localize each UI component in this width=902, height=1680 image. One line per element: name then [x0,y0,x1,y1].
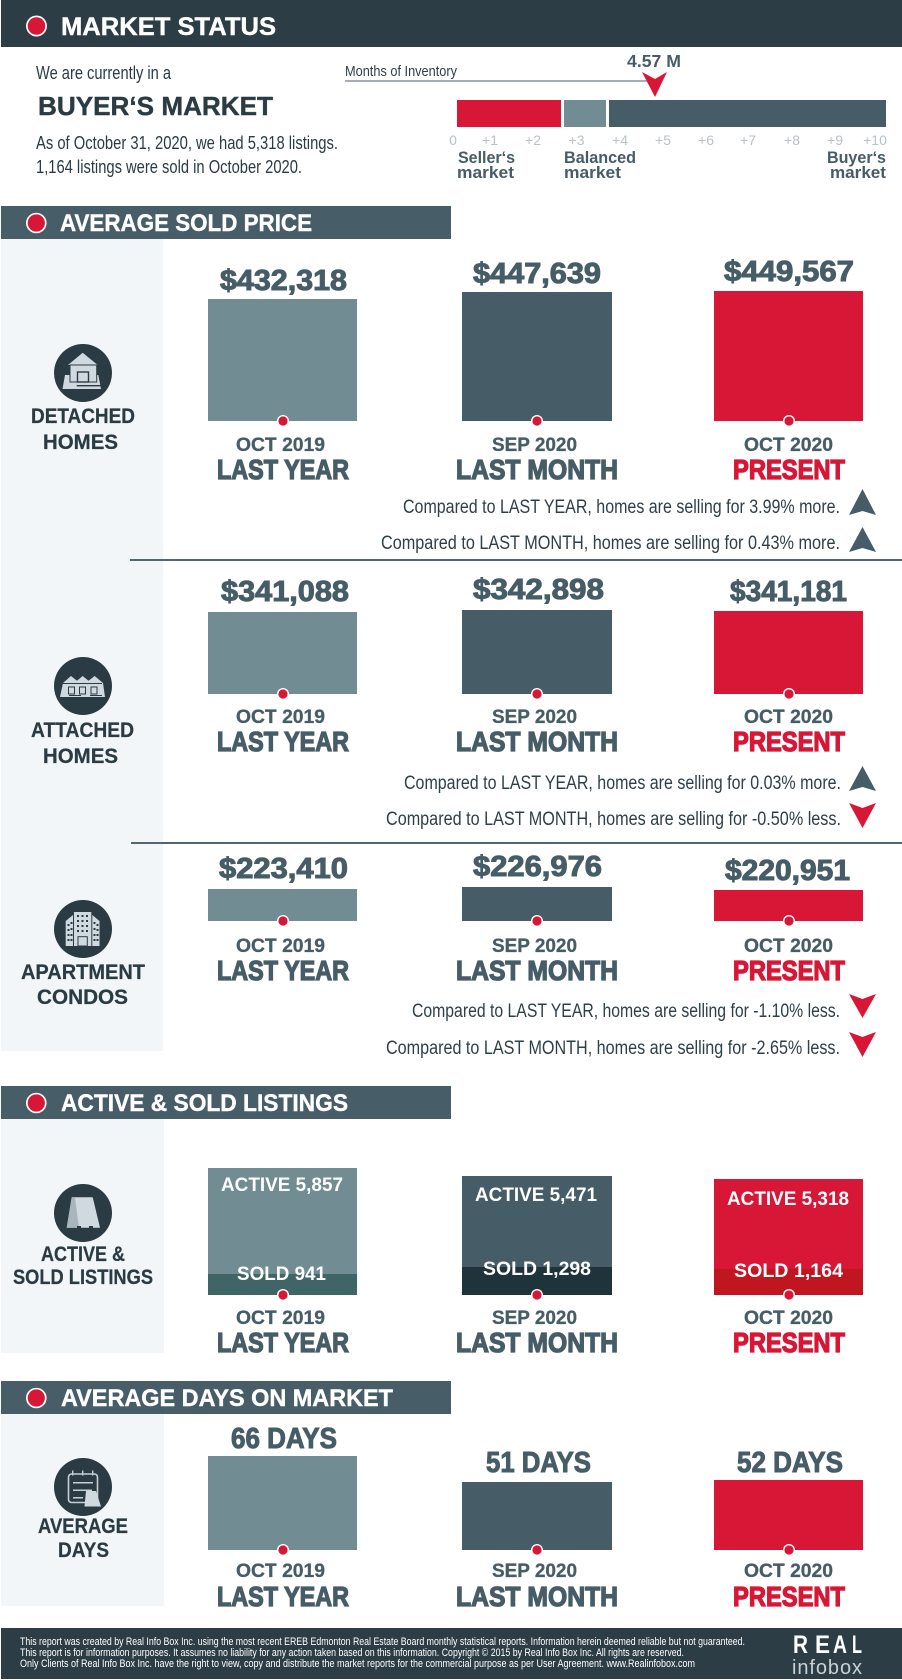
disclaimer text: Only Clients of Real Info Box Inc. have the right to view, copy and distribute the market reports for the commercial purpose as per User Agreement. www.Realinfobox.com [20,1658,695,1670]
chart: detached last year: LAST YEAR [217,454,349,485]
label: active and sold listings [13,1243,153,1289]
label: apartment condos: CONDOS [37,986,128,1009]
chart: days last month [456,1447,618,1612]
comparison: detached [381,489,876,554]
icon: apartment condos [54,900,112,958]
logo: real infobox: infobox [792,1657,862,1679]
chart: apartment last month: SEP 2020 [492,935,577,957]
label: apartment condos: APARTMENT [21,961,145,984]
market status summary text: As of October 31, 2020, we had 5,318 listings. [36,133,338,153]
months of inventory gauge: +1 [482,132,498,148]
chart: listings present: OCT 2020 [744,1307,833,1329]
chart: apartment present [714,855,863,986]
chart: listings last year: SOLD 941 [237,1263,326,1285]
chart: detached last month: SEP 2020 [492,434,577,456]
divider [130,559,902,561]
section heading: average sold price: AVERAGE SOLD PRICE [60,210,312,237]
months of inventory gauge [345,51,887,182]
label: attached homes: ATTACHED [31,719,134,742]
logo: real infobox [792,1631,862,1679]
chart: listings present: PRESENT [733,1327,845,1358]
chart: apartment last year [208,853,357,986]
chart: apartment present: OCT 2020 [744,935,833,957]
icon: attached homes [54,657,112,715]
label: attached homes: HOMES [43,745,118,768]
chart: attached last month: LAST MONTH [456,726,618,757]
chart: attached last month: SEP 2020 [492,706,577,728]
chart: apartment present: PRESENT [733,955,845,986]
chart: listings last month [456,1176,618,1358]
disclaimer text: This report is for information purposes. It assumes no liability for any action taken based on this information. Copyright © 2015 by Real Info Box Inc. All rights are reserved. [20,1647,684,1659]
logo: real infobox: R [793,1631,808,1659]
header: market status [1,0,902,47]
chart: days last year [208,1423,357,1612]
logo: real infobox: A [833,1631,847,1659]
side panel: listings [1,1119,164,1353]
label: average days [38,1515,128,1562]
chart: apartment last month: LAST MONTH [456,955,618,986]
label: active and sold listings: ACTIVE & [41,1243,125,1266]
chart: detached present [714,256,863,485]
chart: days present: 52 DAYS [737,1447,843,1479]
chart: detached last year: OCT 2019 [236,434,325,456]
label: detached homes [31,405,135,454]
chart: attached last month: $342,898 [473,574,604,606]
chart: listings present: SOLD 1,164 [734,1260,843,1282]
chart: listings last month: SOLD 1,298 [483,1258,591,1280]
label: detached homes: DETACHED [31,405,135,428]
chart: attached present: OCT 2020 [744,706,833,728]
comparison: apartment [386,994,876,1059]
chart: detached present: $449,567 [724,256,854,288]
market status summary text: We are currently in a [36,63,172,83]
months of inventory gauge: Buyer‘s [827,148,886,167]
chart: detached present: OCT 2020 [744,434,833,456]
section heading: active and sold listings: ACTIVE & SOLD LISTINGS [61,1090,348,1117]
months of inventory gauge: +8 [784,132,800,148]
chart: days last year: 66 DAYS [231,1423,337,1455]
side panel: property types [1,239,163,1051]
chart: attached last year [208,576,357,757]
chart: detached last year [208,265,357,485]
logo: real infobox: L [852,1631,862,1659]
comparison: attached [386,766,876,830]
chart: listings last year: ACTIVE 5,857 [221,1174,343,1196]
chart: days present: PRESENT [733,1581,845,1612]
header: market status: MARKET STATUS [61,13,276,41]
market status summary text: 1,164 listings were sold in October 2020. [36,157,302,177]
chart: apartment last month [456,851,618,986]
icon: listing sign [54,1184,112,1242]
disclaimer text: This report was created by Real Info Box Inc. using the most recent EREB Edmonton Real Estate Board monthly statistical reports. Information herein deemed reliable but not guaranteed. [20,1636,745,1648]
months of inventory gauge: Balanced [564,148,636,167]
chart: attached present [714,576,863,757]
chart: detached last year: $432,318 [220,265,347,297]
label: attached homes [31,719,134,768]
icon: detached home [54,344,112,402]
section heading: active and sold listings [1,1086,451,1119]
chart: listings last year: LAST YEAR [217,1327,349,1358]
chart: apartment last year: LAST YEAR [217,955,349,986]
chart: days last month: LAST MONTH [456,1581,618,1612]
section heading: average days on market: AVERAGE DAYS ON MARKET [61,1385,393,1412]
chart: detached last month: $447,639 [473,258,601,290]
months of inventory gauge: +2 [525,132,541,148]
chart: apartment last year: $223,410 [219,853,348,885]
months of inventory gauge: +7 [740,132,756,148]
chart: attached present: $341,181 [730,576,847,608]
months of inventory gauge: +6 [698,132,714,148]
logo: real infobox: E [815,1631,830,1659]
market status summary text [36,63,338,177]
chart: apartment last month: $226,976 [473,851,602,883]
chart: days last month: SEP 2020 [492,1560,577,1582]
market status summary text: BUYER‘S MARKET [38,91,273,121]
chart: listings last year: OCT 2019 [236,1307,325,1329]
chart: listings last month: LAST MONTH [456,1327,618,1358]
footer [1,1628,902,1679]
chart: listings present: ACTIVE 5,318 [727,1188,849,1210]
section heading: average sold price [1,206,451,239]
label: average days: AVERAGE [38,1515,128,1538]
months of inventory gauge: +3 [569,132,585,148]
months of inventory gauge: market [564,163,621,182]
chart: listings present [714,1179,863,1358]
chart: apartment present: $220,951 [725,855,850,887]
chart: listings last month: ACTIVE 5,471 [475,1184,597,1206]
chart: listings last year [208,1168,357,1358]
chart: attached last year: $341,088 [221,576,349,608]
months of inventory gauge: +4 [612,132,628,148]
icon: calendar [54,1458,112,1516]
chart: apartment last year: OCT 2019 [236,935,325,957]
months of inventory gauge: 4.57 M [627,51,681,71]
chart: attached present: PRESENT [733,726,845,757]
chart: listings last month: SEP 2020 [492,1307,577,1329]
label: apartment condos [21,961,145,1009]
label: detached homes: HOMES [43,431,118,454]
months of inventory gauge: +9 [827,132,843,148]
side panel: days [1,1414,164,1606]
months of inventory gauge: market [830,163,886,182]
chart: attached last year: OCT 2019 [236,706,325,728]
months of inventory gauge: market [457,163,514,182]
chart: detached last month: LAST MONTH [456,454,618,485]
chart: attached last month [456,574,618,757]
chart: days last year: LAST YEAR [217,1581,349,1612]
months of inventory gauge: Months of Inventory [345,63,457,80]
chart: days present: OCT 2020 [744,1560,833,1582]
months of inventory gauge: +5 [655,132,671,148]
section heading: average days on market [1,1381,451,1414]
months of inventory gauge: 0 [449,132,457,148]
chart: days last year: OCT 2019 [236,1560,325,1582]
chart: days last month: 51 DAYS [486,1447,591,1479]
label: average days: DAYS [58,1539,109,1562]
chart: detached last month [456,258,618,485]
months of inventory gauge: Seller‘s [458,148,515,167]
chart: days present [714,1447,863,1612]
chart: detached present: PRESENT [733,454,845,485]
chart: attached last year: LAST YEAR [217,726,349,757]
label: active and sold listings: SOLD LISTINGS [13,1266,153,1289]
months of inventory gauge: +10 [863,132,887,148]
disclaimer text [20,1636,745,1670]
